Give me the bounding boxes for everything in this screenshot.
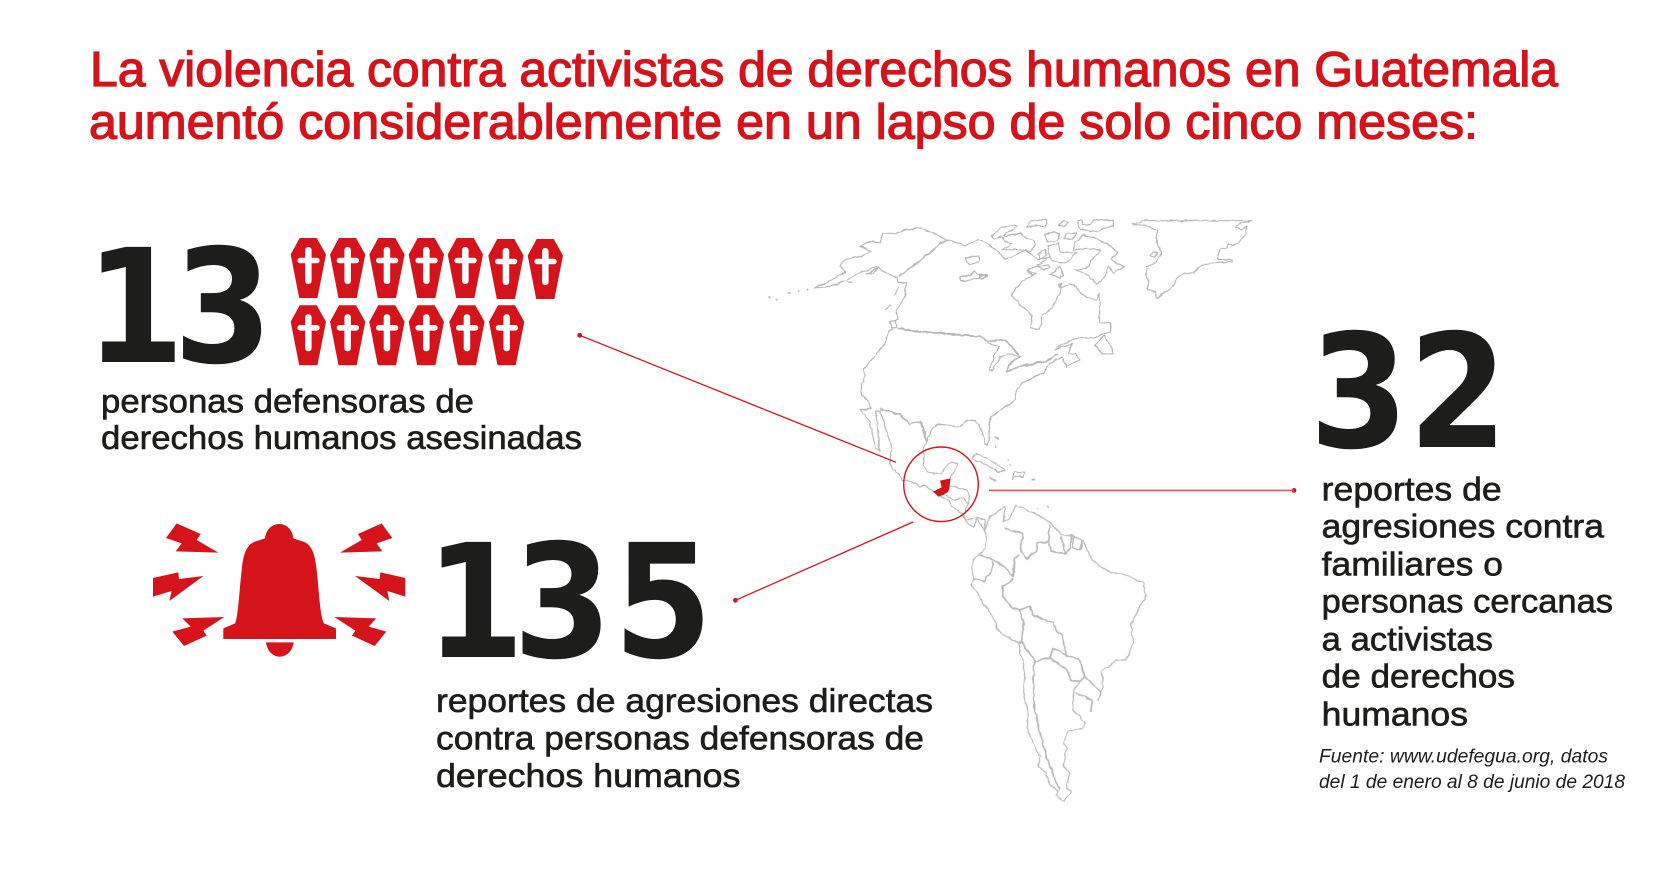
source note xyxy=(1319,747,1625,793)
connector: 135 xyxy=(733,522,913,603)
source note: del 1 de enero al 8 de junio de 2018 xyxy=(1319,772,1625,793)
title xyxy=(89,43,1559,150)
highlight circle xyxy=(904,447,978,522)
label: 32 xyxy=(1322,470,1613,732)
label: 13: personas defensoras de xyxy=(101,383,474,420)
label: 135: derechos humanos xyxy=(436,757,740,794)
label: 32: agresiones contra xyxy=(1322,508,1605,545)
icon: alarm bell xyxy=(153,523,405,657)
label: 32: humanos xyxy=(1322,695,1468,732)
title: aumentó considerablemente en un lapso de solo cinco meses: xyxy=(89,96,1478,150)
label: 32: reportes de xyxy=(1322,470,1502,507)
label: 32: personas cercanas xyxy=(1322,583,1613,620)
connector: 32 xyxy=(989,488,1296,493)
label: 32: familiares o xyxy=(1322,545,1503,582)
Central America and Caribbean xyxy=(896,430,1048,530)
source note: Fuente: www.udefegua.org, datos xyxy=(1319,747,1608,768)
label: 32: a activistas xyxy=(1322,620,1493,657)
label: 135 xyxy=(436,682,933,794)
stat: 135: 135 xyxy=(426,511,712,695)
label: 13 xyxy=(101,383,582,456)
map: the Americas xyxy=(768,219,1252,802)
North America outline xyxy=(768,228,1114,473)
Arctic islands and Greenland xyxy=(980,219,1252,298)
label: 135: contra personas defensoras de xyxy=(436,720,924,756)
South America outline xyxy=(963,505,1147,802)
label: 13: derechos humanos asesinadas xyxy=(101,419,582,456)
Guatemala highlighted xyxy=(933,478,951,497)
title: La violencia contra activistas de derechos humanos en Guatemala xyxy=(90,43,1559,97)
stat: 13: 13 xyxy=(86,216,272,400)
stat: 32: 32 xyxy=(1310,301,1507,485)
label: 32: de derechos xyxy=(1322,658,1515,695)
icon: coffins xyxy=(291,238,563,365)
connector: 13 xyxy=(577,333,896,462)
label: 135: reportes de agresiones directas xyxy=(436,682,933,719)
